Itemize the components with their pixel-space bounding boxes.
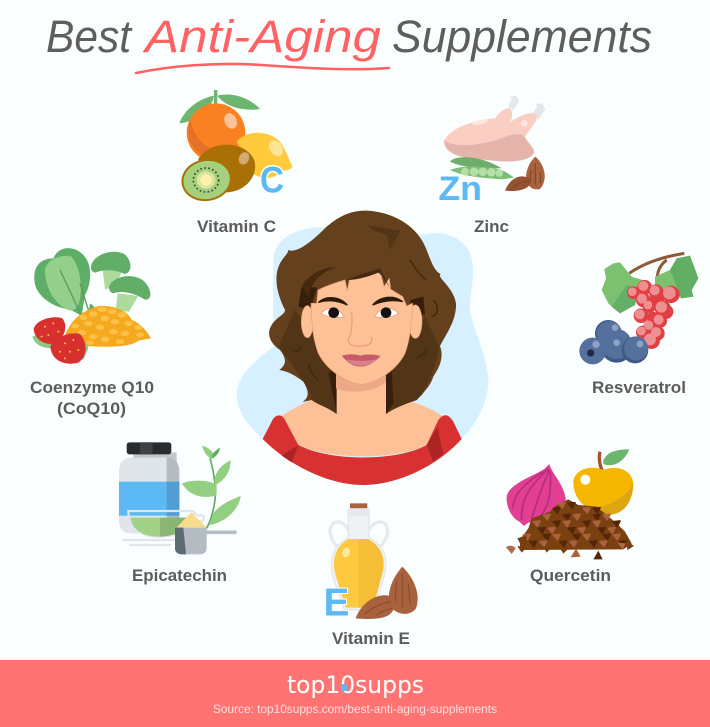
label: Coenzyme Q10: Coenzyme Q10	[30, 379, 154, 397]
logo: top10supps	[287, 671, 424, 699]
icon: zinc foods	[438, 96, 545, 208]
label: Quercetin: Quercetin	[530, 567, 611, 585]
title: Best	[46, 11, 133, 62]
title: Anti-Aging	[142, 11, 381, 62]
icon: resveratrol grapes and blueberries	[579, 253, 698, 364]
icon: vitamin C fruits: C	[260, 159, 284, 200]
label: Epicatechin: Epicatechin	[132, 567, 227, 585]
neck	[337, 360, 386, 414]
icon: epicatechin jar, tea and scoop	[119, 442, 241, 554]
source line: Source: top10supps.com/best-anti-aging-supplements	[213, 702, 497, 716]
title: Supplements	[392, 11, 652, 62]
footer banner	[0, 660, 710, 727]
icon: zinc foods: Zn	[438, 170, 482, 208]
title underline	[136, 64, 389, 73]
label: Vitamin E: Vitamin E	[332, 630, 410, 648]
label: (CoQ10): (CoQ10)	[57, 400, 126, 418]
icon: vitamin E oil and almonds	[324, 503, 418, 624]
icon: quercetin onion, apple, buckwheat	[506, 449, 634, 559]
label: Vitamin C: Vitamin C	[197, 218, 276, 236]
icon: vitamin C fruits	[178, 90, 293, 205]
label: Zinc: Zinc	[474, 218, 509, 236]
title	[46, 11, 652, 62]
label: Resveratrol: Resveratrol	[592, 379, 686, 397]
illustration: woman portrait	[237, 211, 488, 485]
icon: vitamin E oil and almonds: E	[324, 581, 349, 624]
icon: coenzyme Q10 foods	[32, 248, 151, 364]
